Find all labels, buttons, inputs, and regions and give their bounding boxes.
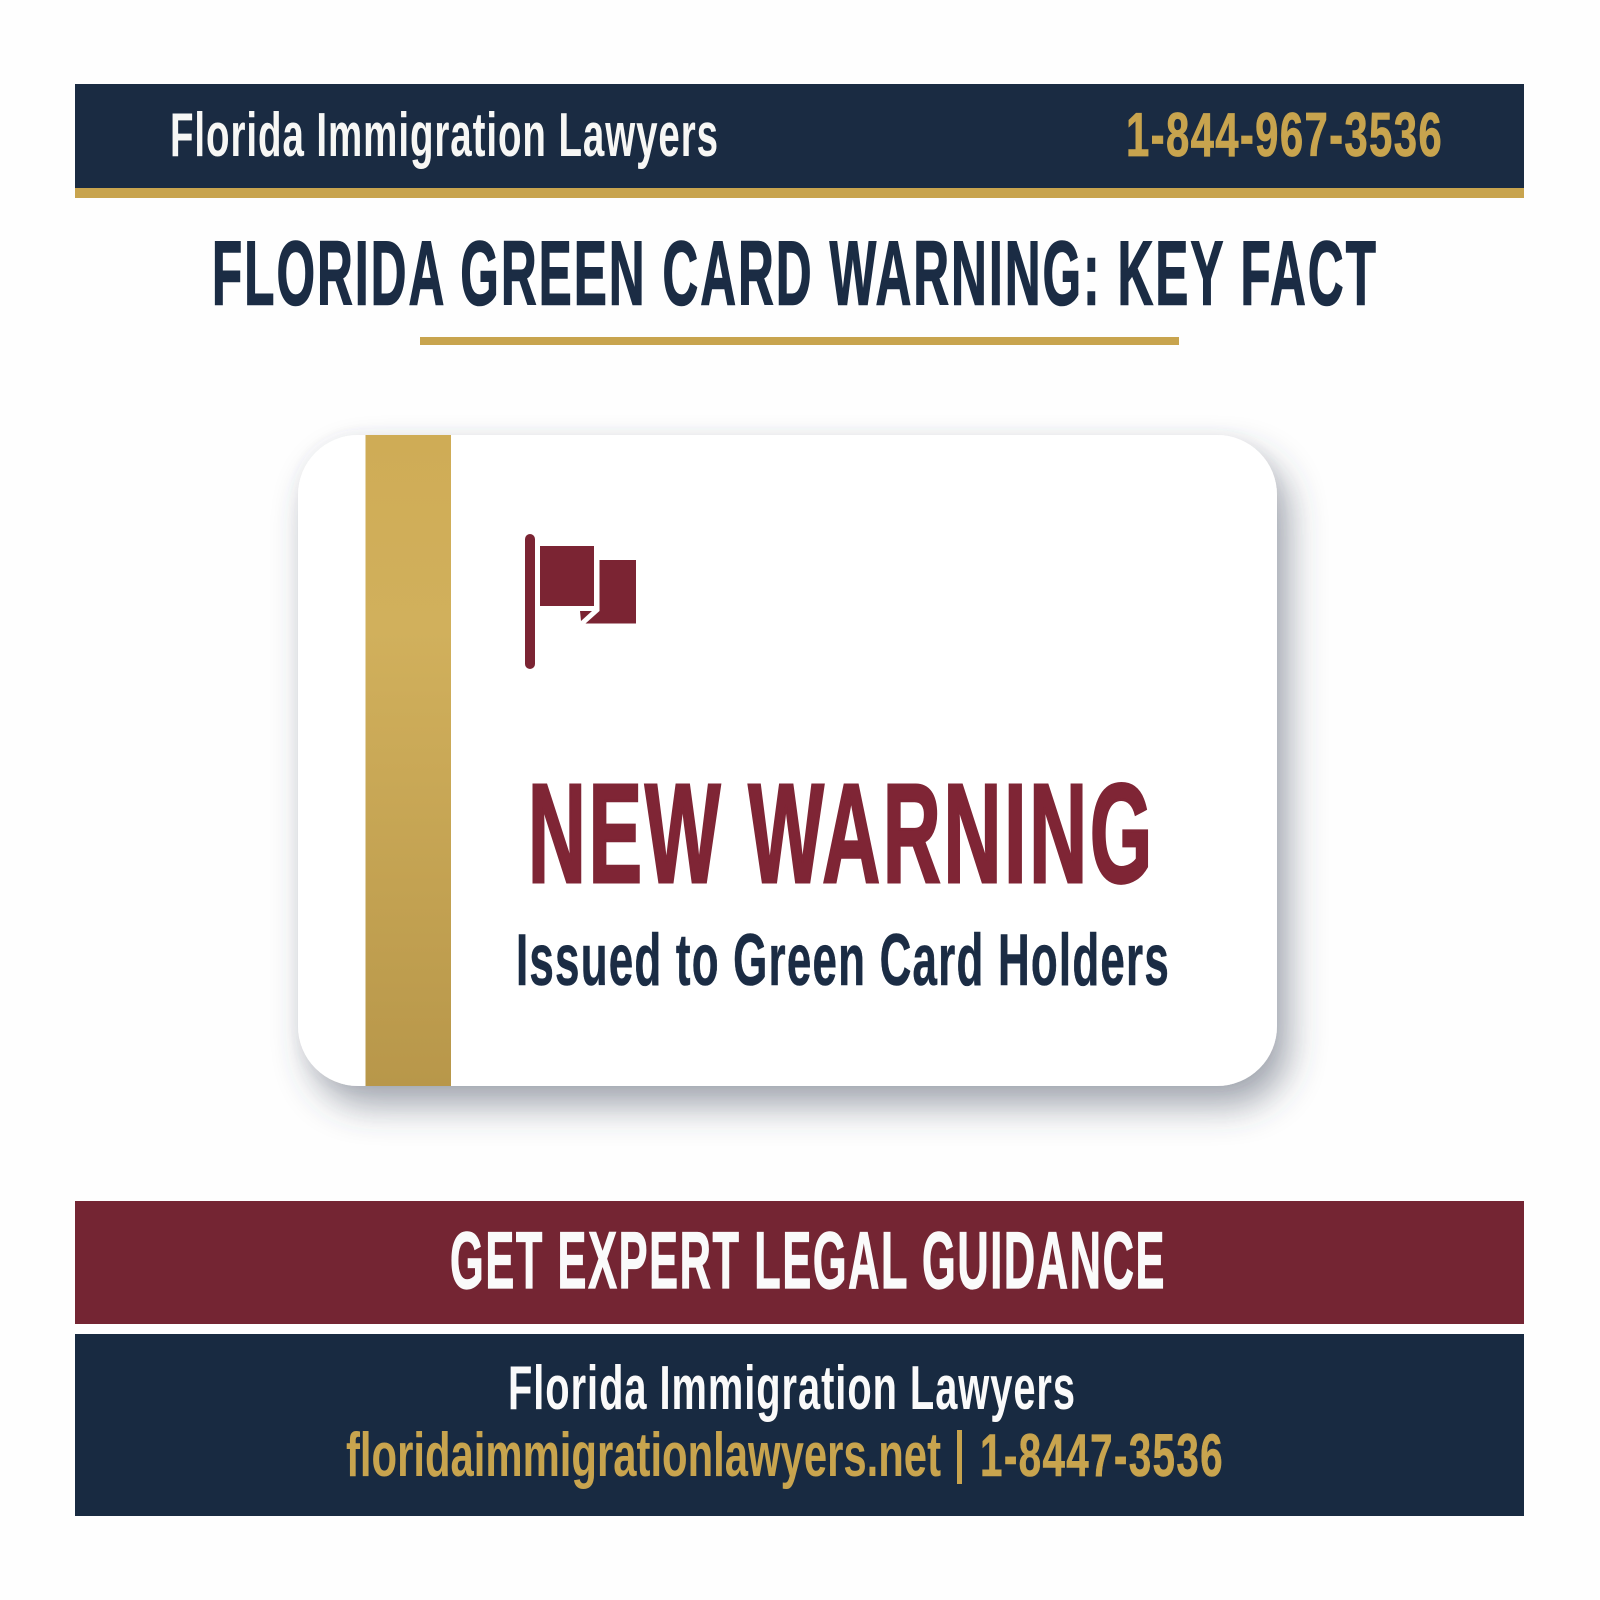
warning headline: NEW WARNING (528, 754, 1155, 912)
header phone number: 1-844-967-3536 (1126, 101, 1443, 170)
title underline (420, 337, 1179, 345)
warning subtext: Issued to Green Card Holders (516, 920, 1170, 1001)
icon: red flag (525, 534, 636, 669)
header banner (75, 84, 1524, 198)
footer firm name: Florida Immigration Lawyers (508, 1354, 1076, 1423)
footer website and phone: floridaimmigrationlawyers.net (346, 1421, 941, 1490)
panel: warning card (298, 435, 1277, 1086)
call to action banner (75, 1201, 1524, 1324)
header firm name: Florida Immigration Lawyers (170, 101, 719, 170)
gold card stripe (366, 435, 451, 1086)
footer contact banner (75, 1334, 1524, 1516)
footer website and phone: 1-8447-3536 (980, 1422, 1224, 1489)
